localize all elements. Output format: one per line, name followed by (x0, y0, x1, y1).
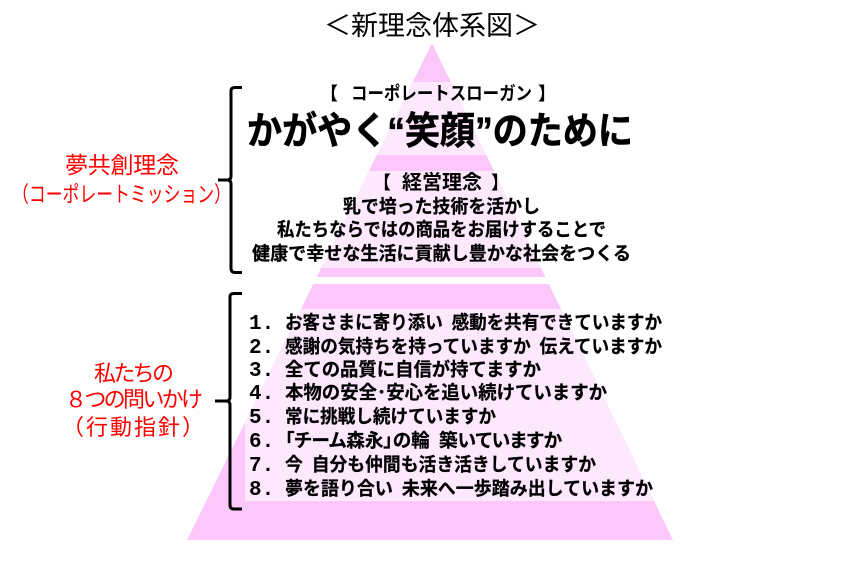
pyramid band: top (412, 43, 451, 82)
label: corporate mission (12, 152, 231, 207)
philosophy text: 私たちならではの商品をお届けすることで (277, 219, 606, 240)
pyramid band: lower divider (316, 268, 546, 277)
eight questions list: 4. (249, 383, 274, 406)
label: corporate mission: （コーポレートミッション） (12, 182, 231, 207)
bracket: eight questions (215, 294, 242, 509)
slogan heading: 】 (538, 84, 556, 104)
eight questions list: 全ての品質に自信が持てますか (285, 359, 541, 380)
eight questions list: 「チーム森永」の輪 築いていますか (285, 430, 563, 451)
eight questions list: 今 自分も仲間も活き活きしていますか (285, 454, 596, 475)
pyramid band: questions panel (245, 309, 653, 501)
philosophy text (252, 196, 631, 264)
label: corporate mission: 夢共創理念 (65, 152, 179, 178)
label: eight questions: 私たちの (94, 361, 174, 386)
pyramid band: philosophy (321, 171, 541, 268)
label: eight questions (62, 361, 204, 440)
eight questions list: 3. (249, 360, 274, 383)
eight questions list: 感謝の気持ちを持っていますか 伝えていますか (285, 336, 662, 357)
eight questions list: 7. (249, 455, 274, 478)
bracket: corporate mission (218, 88, 242, 272)
philosophy heading: 経営理念 (402, 171, 482, 194)
eight questions list: 5. (249, 407, 274, 430)
pyramid (180, 43, 680, 540)
slogan heading: 【 (320, 84, 338, 104)
corporate slogan (247, 83, 633, 153)
eight questions list (249, 312, 662, 502)
eight questions list: お客さまに寄り添い 感動を共有できていますか (285, 312, 662, 333)
pyramid band: divider (369, 155, 494, 171)
pyramid band: upper of lower section (180, 284, 680, 540)
label: eight questions: ８つの問いかけ (65, 387, 203, 412)
title: ＜新理念体系図＞ (324, 11, 540, 41)
slogan text: かがやく“笑顔”のために (247, 111, 633, 153)
philosophy heading: 【 (373, 173, 391, 193)
eight questions list: 6. (249, 431, 274, 454)
philosophy heading: 】 (491, 173, 509, 193)
label: eight questions: （行動指針） (62, 415, 204, 440)
eight questions list: 本物の安全･安心を追い続けていますか (285, 382, 607, 403)
eight questions list: 常に挑戦し続けていますか (285, 406, 496, 427)
management philosophy (252, 171, 631, 264)
eight questions list: 8. (249, 479, 274, 502)
slogan heading: コーポレートスローガン (351, 83, 532, 104)
philosophy text: 乳で培った技術を活かし (343, 196, 540, 217)
eight questions list: 1. (249, 313, 274, 336)
eight questions list: 夢を語り合い 未来へ一歩踏み出していますか (285, 478, 653, 499)
philosophy heading (373, 171, 509, 194)
philosophy text: 健康で幸せな生活に貢献し豊かな社会をつくる (252, 243, 631, 264)
eight questions list: 2. (249, 337, 274, 360)
pyramid band: slogan (377, 82, 486, 155)
